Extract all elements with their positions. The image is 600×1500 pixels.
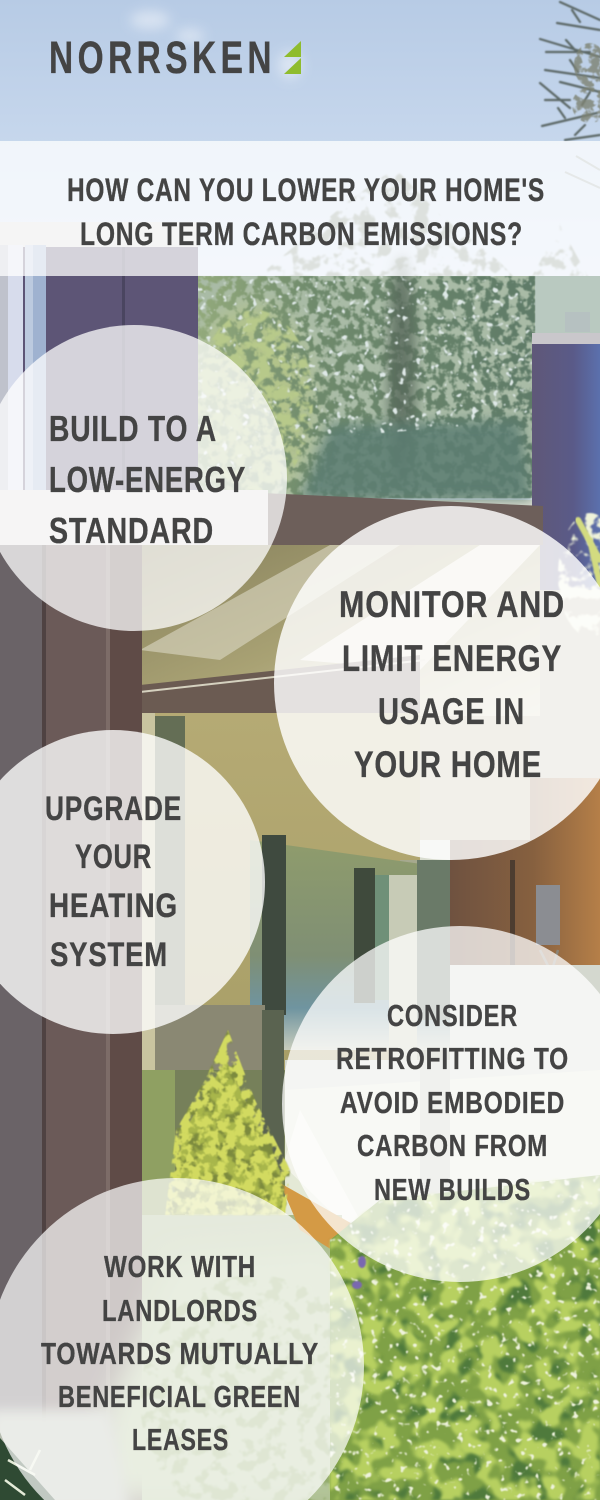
rust clad wall and chair at right [420,590,600,1010]
logo mark: green double triangle [284,41,301,74]
circle backdrop: work with landlords [0,1178,364,1500]
circle backdrop: consider retrofitting [282,926,600,1282]
logo wordmark: NORRSKEN [49,32,276,83]
circle backdrop: upgrade your heating system [0,730,265,1034]
tip: work with landlords: BENEFICIAL GREEN [58,1379,301,1414]
logo: Norrsken [49,32,301,83]
yellow-green conifer shrub [165,1030,290,1215]
tip: work with landlords: LANDLORDS [102,1293,258,1328]
heading band [0,141,600,276]
main tree [190,255,600,505]
spruce tree top right [540,2,600,188]
tip: build to a low-energy standard: BUILD TO A [49,408,217,449]
orange deck plank [280,1183,356,1258]
tip: upgrade your heating system: SYSTEM [50,936,168,974]
window wall [140,713,450,1220]
eave band [0,490,543,545]
circle backdrop: monitor and limit energy usage [274,506,600,860]
tip: monitor and limit energy usage: YOUR HOME [354,744,542,785]
tip: build to a low-energy standard [49,408,246,551]
tip: work with landlords: TOWARDS MUTUALLY [41,1336,319,1371]
right upper block [532,312,600,643]
tip: consider retrofitting: NEW BUILDS [374,1172,531,1207]
tip: work with landlords: LEASES [132,1422,229,1457]
tip: work with landlords [41,1249,319,1457]
pale planting below the last circle [0,1215,372,1500]
purple flowers [352,1256,366,1289]
tip: build to a low-energy standard: STANDARD [49,510,214,551]
patio [283,965,600,1300]
heading [67,172,545,252]
ceiling soffit [140,540,540,716]
cloud wisps [130,11,302,79]
tip: consider retrofitting [336,998,569,1207]
left upper block with windows [0,222,198,497]
circle backdrop: build to a low-energy standard [0,325,287,631]
tip: consider retrofitting: CONSIDER [387,998,518,1033]
tip: monitor and limit energy usage [339,584,565,785]
tip: work with landlords: WORK WITH [104,1249,256,1284]
left brown wall [0,545,142,1500]
tip: build to a low-energy standard: LOW-ENERGY [49,459,246,500]
tip: upgrade your heating system: UPGRADE [45,790,182,828]
conifer branch by monitor circle [558,513,600,637]
sky [0,0,600,500]
tip: monitor and limit energy usage: USAGE IN [378,691,525,732]
tip: upgrade your heating system: YOUR [75,838,152,876]
fern bottom left corner [0,1438,55,1500]
garden foliage bottom right [330,1175,600,1500]
distant tree behind headline [230,168,590,300]
tip: upgrade your heating system [45,790,182,974]
tip: consider retrofitting: CARBON FROM [357,1128,548,1163]
tip: upgrade your heating system: HEATING [49,887,178,925]
